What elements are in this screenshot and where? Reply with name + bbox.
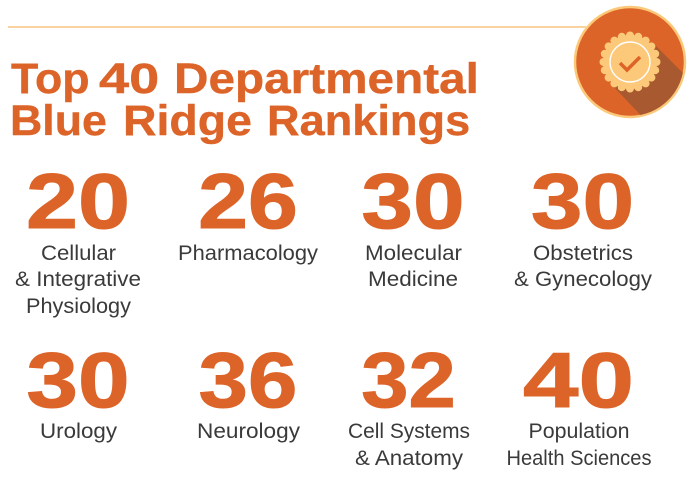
top rule line [8, 26, 586, 28]
title: Blue [10, 97, 107, 145]
stat: Molecular Medicine: Medicine [368, 268, 458, 291]
stat: Obstetrics & Gynecology: & Gynecology [514, 268, 653, 291]
title: 40 [99, 55, 159, 103]
stat: Cellular & Integrative Physiology: 20 [26, 158, 130, 245]
title: Departmental [174, 54, 479, 102]
stat: Neurology: 36 [199, 336, 297, 424]
stat: Cell Systems & Anatomy: 32 [361, 337, 456, 424]
stat: Obstetrics & Gynecology [514, 158, 653, 291]
stat: Cell Systems & Anatomy: & Anatomy [355, 447, 464, 470]
stat: Cellular & Integrative Physiology: Physiology [26, 295, 132, 318]
stat: Molecular Medicine: Molecular [365, 242, 462, 265]
stat: Population Health Sciences [506, 336, 652, 470]
stat: Population Health Sciences: 40 [523, 336, 634, 424]
stat: Cellular & Integrative Physiology: & Integrative [15, 268, 141, 291]
stat: Cellular & Integrative Physiology [15, 158, 141, 318]
stat: Cellular & Integrative Physiology: Cellular [41, 242, 116, 265]
stat: Population Health Sciences: Health Sciences [506, 447, 652, 470]
stat: Molecular Medicine: 30 [361, 158, 465, 245]
stat: Neurology: Neurology [197, 420, 301, 443]
stat: Urology: 30 [26, 337, 130, 424]
icon: badge with check mark [574, 6, 686, 118]
stat: Pharmacology: 26 [198, 157, 298, 245]
stat: Molecular Medicine [361, 158, 465, 291]
stat: Population Health Sciences: Population [528, 420, 630, 443]
stat: Pharmacology: Pharmacology [178, 242, 319, 265]
title: Ridge [123, 97, 252, 145]
title: Top [11, 55, 90, 103]
stat: Obstetrics & Gynecology: 30 [531, 158, 634, 245]
stat: Obstetrics & Gynecology: Obstetrics [533, 242, 633, 265]
title: Rankings [267, 97, 470, 145]
title [10, 54, 479, 145]
stat: Cell Systems & Anatomy: Cell Systems [348, 420, 470, 443]
stat: Urology: Urology [40, 420, 118, 443]
stat: Cell Systems & Anatomy [348, 337, 470, 470]
stat: Pharmacology [178, 157, 319, 265]
